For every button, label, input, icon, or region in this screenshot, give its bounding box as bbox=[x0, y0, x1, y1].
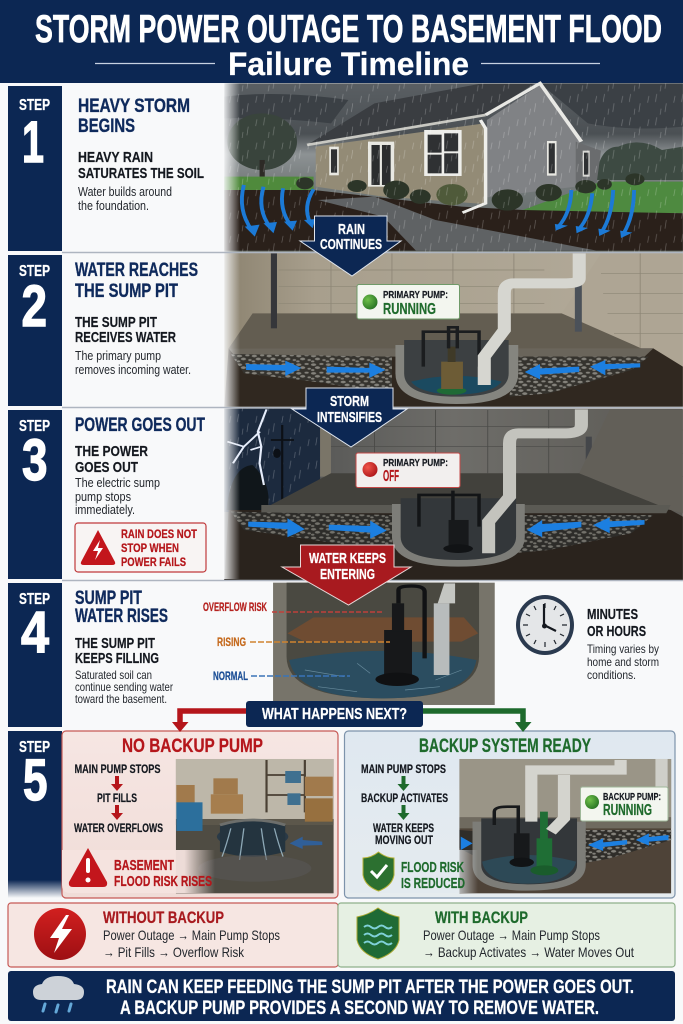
with backup text: Power Outage → Main Pump Stops bbox=[423, 927, 600, 943]
status label: primary pump running: PRIMARY PUMP: bbox=[383, 289, 448, 301]
flow: no backup steps bbox=[74, 762, 163, 835]
status label: primary pump running bbox=[357, 284, 460, 319]
step 1 scene: house in the rain bbox=[224, 83, 683, 252]
without backup text: Power Outage → Main Pump Stops bbox=[103, 927, 280, 943]
step 1 heading bbox=[78, 95, 190, 137]
step 1 heading: HEAVY STORM bbox=[78, 95, 190, 117]
timing note bbox=[587, 606, 659, 682]
step 3 subheading bbox=[75, 443, 148, 476]
panel: backup system ready bbox=[344, 731, 675, 898]
icon: warning triangle bbox=[69, 848, 107, 887]
step 3 subheading: THE POWER bbox=[75, 443, 148, 460]
step 1 badge bbox=[8, 86, 62, 251]
arrow: water keeps entering: ENTERING bbox=[320, 566, 375, 583]
step 2 panel bbox=[8, 255, 198, 406]
step 4 subheading: THE SUMP PIT bbox=[75, 635, 155, 652]
step 4 badge: STEP bbox=[19, 591, 50, 608]
step 1 body text bbox=[78, 185, 172, 213]
arrow: branch to no backup bbox=[172, 711, 248, 732]
status label: backup pump running bbox=[580, 787, 668, 821]
step 5 badge: 5 bbox=[23, 748, 48, 813]
timing note: conditions. bbox=[587, 668, 636, 682]
timing note: OR HOURS bbox=[587, 623, 646, 640]
status label: primary pump off: PRIMARY PUMP: bbox=[383, 457, 448, 469]
step 3 body text: The electric sump bbox=[75, 476, 160, 490]
row separators bbox=[62, 252, 683, 580]
icon: clock bbox=[516, 595, 574, 655]
flood risk reduced callout bbox=[349, 850, 478, 893]
without backup text bbox=[103, 908, 280, 960]
step 4 subheading: KEEPS FILLING bbox=[75, 650, 159, 667]
footer message bbox=[106, 977, 634, 1019]
water level: rising: RISING bbox=[217, 635, 246, 649]
status label: primary pump running: RUNNING bbox=[383, 301, 436, 318]
step 1 panel bbox=[8, 86, 204, 251]
icon: green water shield bbox=[357, 908, 399, 959]
arrow: rain continues: CONTINUES bbox=[320, 236, 382, 253]
step 1 subheading bbox=[78, 149, 204, 182]
flow: backup steps: BACKUP ACTIVATES bbox=[361, 791, 448, 805]
footer banner bbox=[8, 971, 675, 1021]
image: flooded basement bbox=[176, 759, 334, 893]
step 3 scene: power out, pump stopped bbox=[224, 409, 683, 581]
with backup text bbox=[423, 908, 634, 960]
step 2 badge: 2 bbox=[22, 274, 47, 339]
arrow: water keeps entering: WATER KEEPS bbox=[309, 550, 386, 567]
step 3 badge: STEP bbox=[19, 418, 50, 435]
step 3 badge bbox=[8, 410, 62, 579]
icon: warning bolt triangle bbox=[81, 530, 115, 565]
flow: no backup steps: MAIN PUMP STOPS bbox=[74, 762, 160, 776]
status label: backup pump running: BACKUP PUMP: bbox=[603, 791, 661, 803]
step 4 body text: Saturated soil can bbox=[75, 668, 152, 682]
icon: red power bolt bbox=[34, 908, 86, 960]
step 2 heading: WATER REACHES bbox=[75, 259, 198, 281]
step 4 badge: 4 bbox=[21, 600, 49, 665]
step 1 subheading: SATURATES THE SOIL bbox=[78, 165, 204, 182]
timing note: home and storm bbox=[587, 655, 659, 669]
step 1 subheading: HEAVY RAIN bbox=[78, 149, 153, 166]
step 4 panel bbox=[8, 583, 659, 727]
arrow: storm intensifies: STORM bbox=[330, 393, 369, 410]
timing note: Timing varies by bbox=[587, 642, 659, 656]
step 5 badge bbox=[8, 731, 62, 898]
step 3 body text bbox=[75, 476, 160, 517]
step 3 badge: 3 bbox=[22, 428, 48, 493]
without backup text: → Pit Fills → Overflow Risk bbox=[103, 944, 245, 960]
step 4 subheading bbox=[75, 635, 159, 667]
step 4 body text: continue sending water bbox=[75, 680, 173, 694]
with backup text: WITH BACKUP bbox=[435, 908, 528, 927]
step 2 scene: sump pit receiving water bbox=[224, 252, 683, 407]
flow: backup steps bbox=[361, 762, 448, 847]
step 1 badge: 1 bbox=[22, 110, 44, 175]
arrow: storm intensifies bbox=[292, 388, 407, 447]
step 2 badge bbox=[8, 255, 62, 406]
icon: rain cloud bbox=[33, 976, 84, 1012]
water level: overflow risk: OVERFLOW RISK bbox=[203, 600, 267, 614]
flood risk callout bbox=[62, 848, 215, 893]
callout: rain does not stop bbox=[75, 523, 206, 572]
step 4 body text: toward the basement. bbox=[75, 692, 167, 706]
image: backup pump in sump pit bbox=[459, 759, 671, 893]
header banner bbox=[0, 0, 683, 83]
icon: green shield check bbox=[363, 852, 394, 891]
step 1 badge: STEP bbox=[19, 97, 50, 114]
step 3 subheading: GOES OUT bbox=[75, 459, 138, 476]
arrow: water keeps entering bbox=[282, 545, 411, 605]
arrow: rain continues: RAIN bbox=[338, 221, 365, 238]
step 4 heading bbox=[75, 587, 168, 627]
flow: backup steps: WATER KEEPS bbox=[373, 821, 434, 835]
step 5 badge: STEP bbox=[19, 739, 50, 756]
step 3 panel bbox=[8, 410, 206, 579]
step 1 body text: the foundation. bbox=[78, 199, 149, 213]
status label: primary pump off bbox=[356, 453, 460, 488]
step 2 subheading: THE SUMP PIT bbox=[75, 314, 157, 331]
step 2 subheading: RECEIVES WATER bbox=[75, 329, 176, 346]
flood risk callout: BASEMENT bbox=[114, 858, 174, 874]
flood risk callout: FLOOD RISK RISES bbox=[114, 874, 212, 890]
sump pit water level illustration bbox=[273, 583, 495, 705]
step 2 body text: The primary pump bbox=[75, 349, 161, 363]
panel: no backup pump bbox=[62, 731, 338, 898]
step 1 heading: BEGINS bbox=[78, 115, 135, 137]
flow: no backup steps: WATER OVERFLOWS bbox=[74, 821, 163, 835]
what happens next label bbox=[246, 701, 423, 727]
callout: rain does not stop: STOP WHEN bbox=[121, 541, 179, 555]
photo fade into text column bbox=[222, 83, 240, 579]
panel: no backup pump: NO BACKUP PUMP bbox=[122, 735, 263, 757]
status label: primary pump off: OFF bbox=[383, 468, 399, 485]
arrow: rain continues bbox=[300, 216, 401, 276]
step 3 body text: pump stops bbox=[75, 490, 131, 504]
without backup text: WITHOUT BACKUP bbox=[103, 908, 224, 927]
step 3 body text: immediately. bbox=[75, 503, 135, 517]
panel: comparison summary bbox=[8, 903, 675, 967]
water level: normal: NORMAL bbox=[213, 669, 248, 683]
status label: backup pump running: RUNNING bbox=[603, 802, 652, 819]
step 2 heading: THE SUMP PIT bbox=[75, 280, 178, 302]
flow: backup steps: MOVING OUT bbox=[375, 833, 433, 847]
step 4 badge bbox=[8, 583, 62, 727]
callout: rain does not stop: RAIN DOES NOT bbox=[121, 527, 198, 541]
with backup text: → Backup Activates → Water Moves Out bbox=[423, 944, 634, 960]
step 4 heading: SUMP PIT bbox=[75, 587, 142, 609]
flow: no backup steps: PIT FILLS bbox=[97, 791, 137, 805]
step 2 badge: STEP bbox=[19, 263, 50, 280]
flow: backup steps: MAIN PUMP STOPS bbox=[361, 762, 446, 776]
arrow: branch to backup bbox=[421, 711, 532, 732]
subtitle: Failure Timeline bbox=[228, 46, 469, 82]
what happens next label: WHAT HAPPENS NEXT? bbox=[262, 706, 407, 723]
arrow: storm intensifies: INTENSIFIES bbox=[317, 409, 382, 426]
step 1 body text: Water builds around bbox=[78, 185, 172, 199]
flood risk reduced callout: IS REDUCED bbox=[401, 876, 465, 892]
flood risk reduced callout: FLOOD RISK bbox=[401, 860, 464, 876]
panel: backup system ready: BACKUP SYSTEM READY bbox=[419, 735, 591, 757]
step 2 body text: removes incoming water. bbox=[75, 363, 191, 377]
water level: normal bbox=[213, 669, 350, 683]
step 4 heading: WATER RISES bbox=[75, 605, 168, 627]
callout: rain does not stop: POWER FAILS bbox=[121, 555, 186, 569]
step 2 subheading bbox=[75, 314, 176, 346]
step 5 panel bbox=[8, 731, 675, 898]
step 4 body text bbox=[75, 668, 173, 706]
step 3 heading: POWER GOES OUT bbox=[75, 414, 205, 436]
step 2 body text bbox=[75, 349, 191, 377]
timing note: MINUTES bbox=[587, 606, 638, 623]
step 2 heading bbox=[75, 259, 198, 302]
